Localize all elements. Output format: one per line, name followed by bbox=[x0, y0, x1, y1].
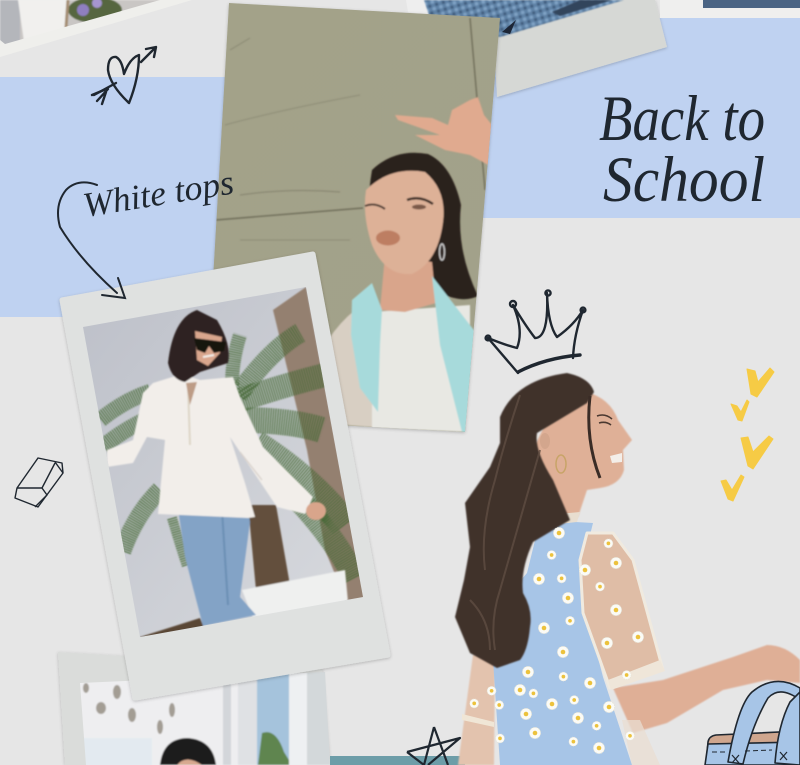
floor bbox=[140, 617, 204, 637]
photo strip: top right corner bbox=[660, 0, 800, 18]
icon: crown bbox=[486, 290, 585, 373]
brick wall bbox=[273, 287, 365, 603]
sky and tree bbox=[257, 670, 289, 765]
hand bbox=[306, 502, 326, 520]
hair bbox=[455, 373, 594, 668]
photo: selfie against wall bbox=[205, 3, 500, 432]
pillar bbox=[238, 680, 257, 765]
hair highlights bbox=[470, 395, 540, 650]
teal corner photo bbox=[330, 756, 465, 765]
icon: curved arrow bbox=[58, 182, 125, 298]
right woman in daisy dress bbox=[455, 373, 800, 765]
heading: Back to School bbox=[599, 83, 765, 216]
smile bbox=[610, 453, 622, 463]
jeans bbox=[178, 514, 256, 626]
sheer sleeve bbox=[580, 533, 663, 688]
polaroid: main white top photo bbox=[62, 254, 388, 698]
icons: yellow check marks bbox=[721, 368, 774, 501]
icon: tote bag bbox=[705, 681, 800, 765]
polaroid: top right, patterned knit photo bbox=[406, 0, 667, 97]
neck and face bbox=[535, 392, 632, 517]
palm fronds bbox=[100, 333, 355, 578]
icon: eraser bbox=[15, 458, 63, 507]
sunglasses bbox=[194, 338, 226, 353]
handwritten text: White tops: White tops bbox=[80, 163, 236, 225]
ear and earring bbox=[540, 433, 550, 449]
wall cracks and lines bbox=[216, 18, 485, 240]
palm trunk bbox=[248, 505, 290, 590]
polaroid: bottom left bbox=[58, 652, 333, 765]
hair bbox=[168, 310, 229, 382]
curtain bbox=[288, 760, 292, 765]
blue band: left bbox=[0, 77, 230, 317]
lattice screen bbox=[83, 683, 175, 734]
face bbox=[365, 171, 444, 274]
far arm bbox=[458, 655, 495, 765]
icon: star doodle bbox=[407, 727, 460, 765]
dress bbox=[493, 520, 632, 765]
blouse bbox=[107, 374, 313, 518]
heading: Back to School: School bbox=[603, 144, 765, 216]
jacket bbox=[331, 313, 373, 427]
polaroid: top left, partly cropped bbox=[0, 0, 192, 57]
icon: heart with arrow bbox=[92, 47, 156, 104]
scarf bbox=[351, 283, 382, 412]
smile bbox=[203, 355, 214, 357]
heading: Back to School: Back to bbox=[599, 83, 765, 155]
collar bbox=[537, 512, 580, 526]
loose hair strand bbox=[589, 396, 600, 478]
hand bbox=[395, 97, 492, 167]
near arm bbox=[613, 645, 800, 733]
face bbox=[195, 331, 222, 366]
selfie woman bbox=[328, 97, 492, 432]
neck bbox=[380, 255, 436, 312]
eye and brow bbox=[597, 415, 612, 425]
blue band: right bbox=[480, 18, 800, 218]
white top bbox=[372, 305, 470, 432]
hair bbox=[369, 153, 478, 299]
planter bbox=[242, 570, 348, 618]
daisies bbox=[470, 527, 644, 754]
hair of model bbox=[160, 738, 216, 765]
